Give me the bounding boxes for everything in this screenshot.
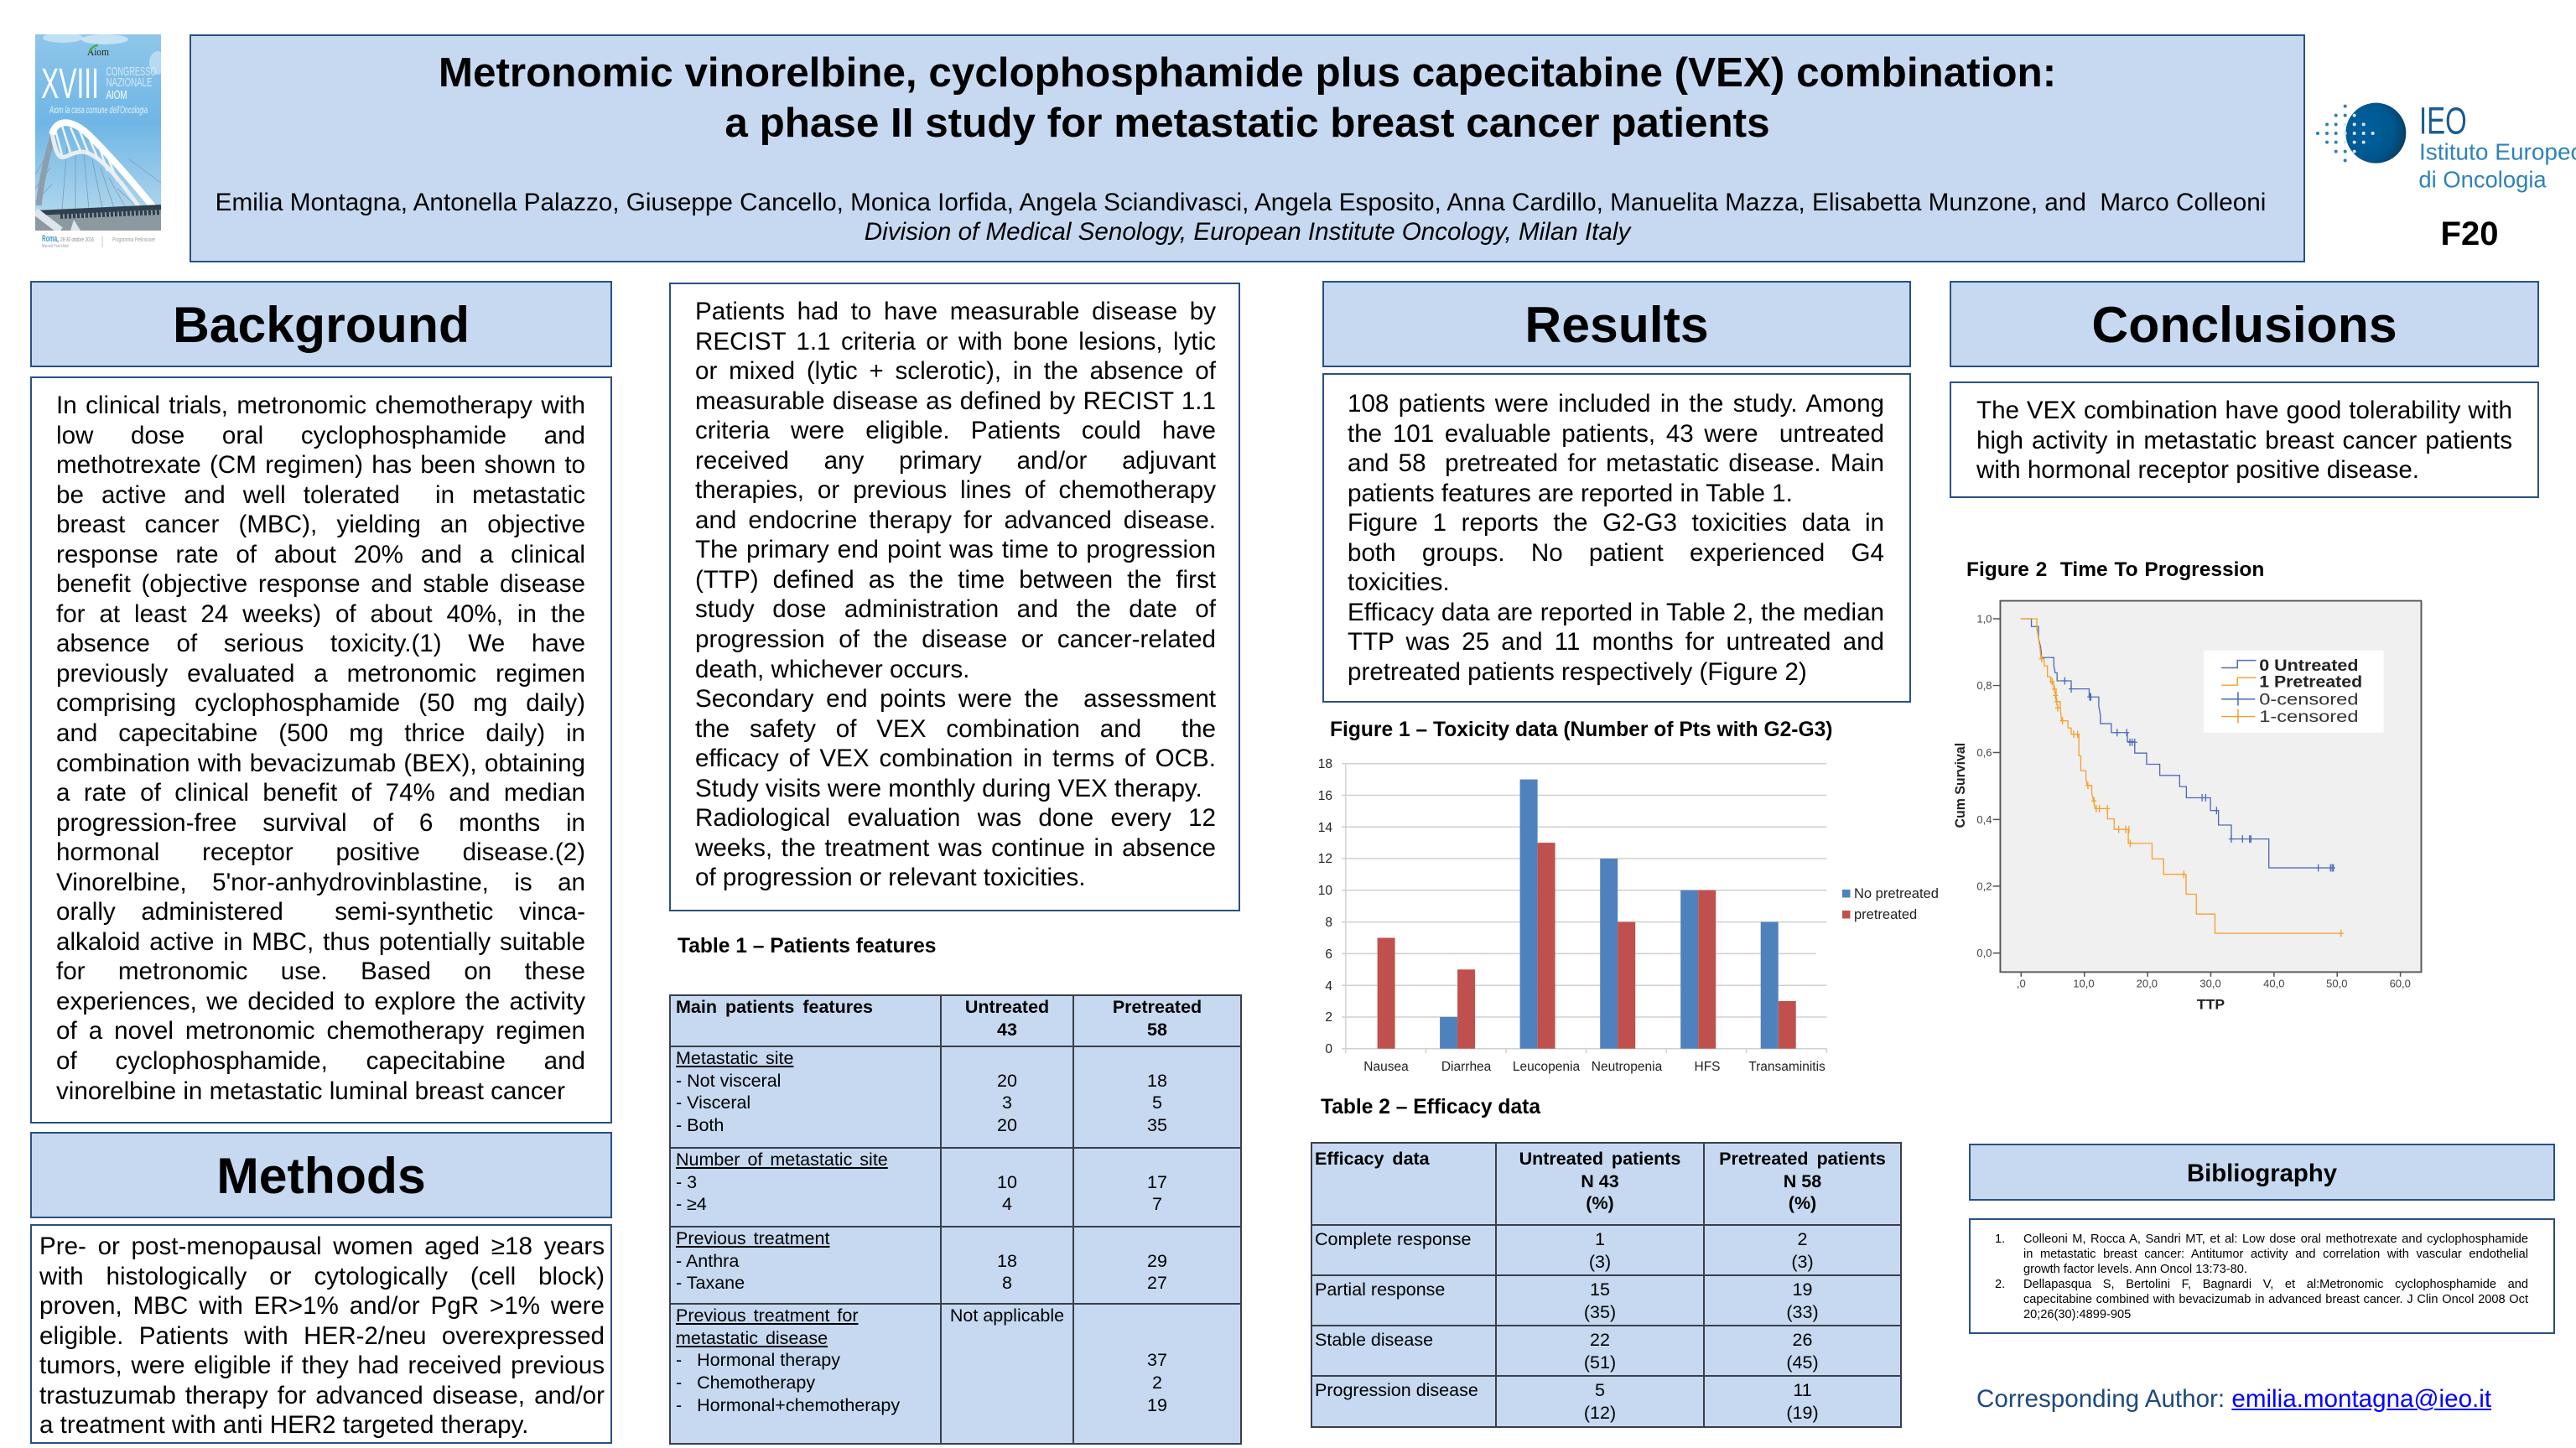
table 1: patients features: 35 [1147, 1115, 1167, 1135]
authors: Emilia Montagna, Antonella Palazzo, Giuseppe Cancello, Monica Iorfida, Angela Sciandivasci, Angela Esposito, Anna Cardillo, Manuelita Mazza, Elisabetta Munzone, and Marco Colleoni [216, 189, 2266, 216]
table 1: patients features: 17 [1147, 1172, 1167, 1192]
bar chart: toxicity data: 4 [1325, 979, 1332, 994]
heading: Results [1322, 281, 1911, 367]
table 2: efficacy data: 1 [1595, 1229, 1605, 1249]
background paragraph: a rate of clinical benefit of 74% and median [56, 779, 585, 807]
table 2 label: Table 2 – Efficacy data [1321, 1096, 1540, 1118]
survival chart: time to progression: 0,2 [1976, 880, 1992, 892]
methods continued paragraph: of progression or relevant toxicities. [695, 864, 1085, 891]
heading: Conclusions [1950, 281, 2539, 367]
methods continued paragraph: death, whichever occurs. [695, 656, 969, 683]
panel: conclusions text [1950, 381, 2539, 498]
background paragraph: vinorelbine in metastatic luminal breast cancer [56, 1077, 565, 1105]
title: a phase II study for metastatic breast cancer patients [724, 100, 1770, 146]
congress poster image: Marriott Park Hotel [42, 244, 69, 249]
results paragraph: Figure 1 reports the G2-G3 toxicities data in [1348, 509, 1884, 537]
methods paragraph: with histologically or cytologically (cell block) [39, 1263, 605, 1290]
table 2: efficacy data: (%) [1789, 1193, 1816, 1213]
table 2: efficacy data: N 43 [1581, 1171, 1619, 1191]
chart legend [1842, 886, 1939, 922]
table 1: patients features: 37 [1147, 1350, 1167, 1370]
affiliation: Division of Medical Senology, European Institute Oncology, Milan Italy [865, 218, 1630, 246]
background paragraph: be active and well tolerated in metastatic [56, 481, 585, 509]
background paragraph: experiences, we decided to explore the activity [56, 988, 585, 1015]
table 1: patients features: - ≥4 [676, 1194, 707, 1214]
bar chart: toxicity data: HFS [1694, 1060, 1721, 1074]
bar chart: toxicity data: 8 [1325, 916, 1332, 930]
survival chart: time to progression: 20,0 [2137, 978, 2158, 989]
methods continued paragraph: (TTP) defined as the time between the first [695, 566, 1216, 594]
survival chart: time to progression: 40,0 [2263, 978, 2284, 989]
table 1: patients features: 20 [997, 1071, 1017, 1091]
table 2: efficacy data: Progression disease [1315, 1380, 1478, 1400]
survival chart: time to progression: 1,0 [1976, 613, 1992, 625]
methods paragraph: Pre- or post-menopausal women aged ≥18 years [39, 1233, 605, 1260]
methods continued paragraph: the safety of VEX combination and the [695, 715, 1216, 743]
table 2: efficacy data: Untreated patients [1519, 1149, 1680, 1169]
table 2: efficacy data: 26 [1793, 1330, 1812, 1350]
panel: bibliography references [1969, 1218, 2555, 1334]
icon: IEO logo [2316, 99, 2576, 193]
background paragraph: methotrexate (CM regimen) has been shown to [56, 451, 585, 479]
results paragraph: toxicities. [1348, 568, 1450, 596]
chart legend: No pretreated [1854, 886, 1939, 901]
table 2: efficacy data: 5 [1595, 1380, 1605, 1400]
table 2: efficacy data [1311, 1142, 1902, 1428]
table 1: patients features: 18 [1147, 1071, 1167, 1091]
table 2: efficacy data: 19 [1793, 1279, 1812, 1300]
survival chart legend [2204, 651, 2384, 733]
methods continued paragraph: RECIST 1.1 criteria or with bone lesions, lytic [695, 328, 1216, 356]
bar chart: toxicity data: Transaminitis [1748, 1060, 1826, 1074]
reference 2: 2. [1995, 1278, 2005, 1291]
survival chart: time to progression: 10,0 [2073, 978, 2095, 989]
methods paragraph: a treatment with anti HER2 targeted therapy. [39, 1411, 528, 1439]
background paragraph: comprising cyclophosphamide (50 mg daily) [56, 689, 585, 717]
background paragraph: of cyclophosphamide, capecitabine and [56, 1047, 585, 1075]
results paragraph: pretreated patients respectively (Figure 2) [1348, 658, 1807, 686]
methods continued paragraph: progression of the disease or cancer-related [695, 625, 1216, 653]
table 2: efficacy data: (19) [1786, 1403, 1819, 1423]
background paragraph [56, 392, 585, 1105]
table 2: efficacy data: (33) [1786, 1302, 1819, 1322]
table 1: patients features: 43 [997, 1020, 1017, 1040]
background paragraph: for at least 24 weeks) of about 40%, in the [56, 600, 585, 628]
heading: Background [30, 281, 612, 367]
congress poster image: 28-30 ottobre 2016 [60, 237, 94, 243]
methods continued paragraph: weeks, the treatment was continue in absence [695, 834, 1216, 862]
congress poster image: XVIII [41, 60, 99, 107]
table 1: patients features: - Chemotherapy [676, 1373, 815, 1393]
congress poster image: NAZIONALE [106, 75, 153, 90]
table 1: patients features: - Taxane [676, 1273, 745, 1293]
table 2: efficacy data: N 58 [1784, 1171, 1821, 1191]
background paragraph: for metronomic use. Based on these [56, 958, 585, 985]
survival chart: time to progression: ,0 [2017, 978, 2026, 989]
results paragraph: TTP was 25 and 11 months for untreated and [1348, 628, 1884, 656]
table 1: patients features: - Not visceral [676, 1071, 781, 1091]
bar chart: toxicity data: 12 [1318, 852, 1332, 866]
table 1: patients features: - Anthra [676, 1251, 739, 1271]
methods continued paragraph: and endocrine therapy for advanced disease. [695, 506, 1216, 534]
table 1: patients features: Metastatic site [676, 1048, 793, 1068]
reference 2: capecitabine combined with bevacizumab in advanced breast cancer. J Clin Oncol 2008 Oct [2023, 1293, 2528, 1306]
table 2: efficacy data: (51) [1584, 1352, 1616, 1373]
methods continued paragraph: efficacy of VEX combination in terms of OCB. [695, 745, 1216, 772]
survival chart legend: 1-censored [2259, 708, 2358, 726]
table 1: patients features: Previous treatment [676, 1228, 829, 1248]
reference 2 [1995, 1278, 2528, 1321]
poster code: F20 [2441, 215, 2498, 252]
survival chart: time to progression: 0,6 [1976, 746, 1992, 759]
bar chart: toxicity data: Diarrhea [1441, 1060, 1492, 1074]
table 2: efficacy data: Efficacy data [1315, 1149, 1430, 1169]
congress poster image [35, 34, 161, 249]
results paragraph: patients features are reported in Table 1. [1348, 480, 1793, 507]
methods continued paragraph: Radiological evaluation was done every 12 [695, 804, 1216, 832]
bar chart: toxicity data: Neutropenia [1592, 1060, 1663, 1074]
table 1: patients features: 19 [1147, 1395, 1167, 1415]
table 1: patients features: 27 [1147, 1273, 1167, 1293]
bar chart: toxicity data: 16 [1318, 789, 1332, 803]
table 1: patients features: 2 [1152, 1373, 1162, 1393]
table 1: patients features: 20 [997, 1115, 1017, 1135]
survival chart legend: 0 Untreated [2259, 657, 2358, 675]
survival chart: time to progression: 30,0 [2199, 978, 2221, 989]
methods continued paragraph: Patients had to have measurable disease by [695, 298, 1216, 325]
survival chart legend: 1 Pretreated [2259, 673, 2362, 691]
survival chart legend: 0-censored [2259, 691, 2358, 708]
table 1: patients features: 5 [1152, 1092, 1162, 1113]
background paragraph: benefit (objective response and stable disease [56, 570, 585, 598]
survival chart: time to progression: 0,0 [1976, 947, 1992, 959]
table 2: efficacy data: (%) [1586, 1193, 1614, 1213]
heading: Bibliography: Bibliography [2187, 1160, 2337, 1187]
methods paragraph [39, 1233, 605, 1439]
methods continued paragraph: measurable disease as defined by RECIST 1.1 [695, 387, 1216, 415]
heading: Methods [30, 1132, 612, 1218]
table 1: patients features: 4 [1002, 1194, 1012, 1214]
background paragraph: alkaloid active in MBC, thus potentially suitable [56, 928, 585, 956]
methods continued paragraph: received any primary and/or adjuvant [695, 447, 1216, 475]
results paragraph [1348, 390, 1884, 686]
results paragraph: the 101 evaluable patients, 43 were untreated [1348, 420, 1884, 448]
heading: Results: Results [1524, 296, 1709, 353]
reference 2: 20;26(30):4899-905 [2023, 1308, 2131, 1321]
background paragraph: breast cancer (MBC), yielding an objective [56, 511, 585, 538]
methods continued paragraph: Study visits were monthly during VEX therapy. [695, 775, 1202, 802]
heading: Conclusions: Conclusions [2091, 296, 2397, 353]
title: Metronomic vinorelbine, cyclophosphamide plus capecitabine (VEX) combination: [439, 49, 2056, 96]
table 1: patients features: Previous treatment for [676, 1305, 859, 1326]
results paragraph: Efficacy data are reported in Table 2, the median [1348, 599, 1884, 626]
methods continued paragraph: criteria were eligible. Patients could have [695, 417, 1216, 444]
icon: IEO logo: IEO [2419, 99, 2467, 142]
reference 1: 1. [1995, 1233, 2005, 1246]
survival chart: time to progression: 0,8 [1976, 679, 1992, 692]
table 1: patients features: 7 [1152, 1194, 1162, 1214]
survival chart: time to progression: Cum Survival [1953, 743, 1968, 828]
reference 2: Dellapasqua S, Bertolini F, Bagnardi V, et al:Metronomic cyclophosphamide and [2023, 1278, 2528, 1291]
methods continued paragraph: study dose administration and the date of [695, 595, 1216, 623]
heading: Methods: Methods [216, 1147, 426, 1204]
background paragraph: of a novel metronomic chemotherapy regimen [56, 1017, 585, 1045]
reference 1: Colleoni M, Rocca A, Sandri MT, et al: Low dose oral methotrexate and cyclophosphamide [2023, 1233, 2528, 1246]
table 1: patients features: - Hormonal therapy [676, 1350, 840, 1370]
background paragraph: absence of serious toxicity.(1) We have [56, 630, 585, 657]
conclusions paragraph: The VEX combination have good tolerability with [1976, 397, 2512, 424]
series: pretreated [1378, 843, 1796, 1049]
background paragraph: In clinical trials, metronomic chemotherapy with [56, 392, 585, 419]
results paragraph: 108 patients were included in the study. Among [1348, 390, 1884, 418]
conclusions paragraph [1976, 397, 2512, 484]
methods continued paragraph: The primary end point was time to progression [695, 536, 1216, 563]
corresponding author: Corresponding Author: emilia.montagna@ieo.it [1976, 1385, 2491, 1413]
bar chart: toxicity data: 2 [1325, 1010, 1332, 1025]
title banner [190, 34, 2305, 262]
methods paragraph: tumors, were eligible if they had received previous [39, 1352, 605, 1379]
table 1: patients features: 58 [1147, 1020, 1167, 1040]
methods continued paragraph: therapies, or previous lines of chemotherapy [695, 476, 1216, 504]
background paragraph: combination with bevacizumab (BEX), obtaining [56, 750, 585, 777]
table 2: efficacy data: (35) [1584, 1302, 1616, 1322]
background paragraph: orally administered semi-synthetic vinca- [56, 898, 585, 926]
table 1: patients features: 3 [1002, 1092, 1012, 1113]
background paragraph: Vinorelbine, 5'nor-anhydrovinblastine, is an [56, 869, 585, 896]
title [439, 49, 2056, 146]
methods continued paragraph: or mixed (lytic + sclerotic), in the absence of [695, 357, 1216, 385]
methods paragraph: proven, MBC with ER>1% and/or PgR >1% were [39, 1292, 605, 1320]
panel: background text [30, 376, 612, 1124]
figure 2 label: Figure 2 Time To Progression [1966, 558, 2264, 581]
table 2: efficacy data: 15 [1590, 1279, 1610, 1300]
conclusions paragraph: with hormonal receptor positive disease. [1976, 456, 2419, 484]
congress poster image: AIOM [106, 88, 127, 102]
series: No pretreated [1440, 780, 1779, 1049]
table 2: efficacy data: (12) [1584, 1403, 1616, 1423]
background paragraph: previously evaluated a metronomic regimen [56, 660, 585, 688]
bar chart: toxicity data: Leucopenia [1513, 1060, 1580, 1074]
conclusions paragraph: high activity in metastatic breast cancer patients [1976, 427, 2512, 454]
methods paragraph: trastuzumab therapy for advanced disease, and/or [39, 1382, 605, 1409]
results paragraph: both groups. No patient experienced G4 [1348, 539, 1884, 567]
chart legend: pretreated [1854, 907, 1917, 922]
background paragraph: hormonal receptor positive disease.(2) [56, 838, 585, 866]
table 2: efficacy data: (3) [1589, 1252, 1611, 1272]
panel: methods text [30, 1224, 612, 1444]
bar chart: toxicity data: Nausea [1363, 1060, 1409, 1074]
icon: IEO logo: di Oncologia [2418, 166, 2547, 192]
background paragraph: and capecitabine (500 mg thrice daily) in [56, 719, 585, 747]
table 1 label: Table 1 – Patients features [678, 935, 936, 958]
table 1: patients features: Pretreated [1113, 997, 1202, 1017]
table 2: efficacy data: 22 [1590, 1330, 1610, 1350]
table 1: patients features: - Visceral [676, 1092, 750, 1113]
table 2: efficacy data: Pretreated patients [1719, 1149, 1886, 1169]
bar chart: toxicity data [1318, 757, 1939, 1074]
table 2: efficacy data: 2 [1798, 1229, 1807, 1249]
results paragraph: and 58 pretreated for metastatic disease. Main [1348, 449, 1884, 477]
congress poster image: Programma Preliminare [112, 237, 155, 243]
heading: Bibliography [1969, 1144, 2555, 1201]
background paragraph: low dose oral cyclophosphamide and [56, 422, 585, 449]
curve: pretreated [2021, 619, 2344, 937]
methods paragraph: eligible. Patients with HER-2/neu overexpressed [39, 1322, 605, 1350]
survival chart: time to progression: 50,0 [2326, 978, 2347, 989]
table 1: patients features: - 3 [676, 1172, 697, 1192]
methods continued paragraph: Secondary end points were the assessment [695, 685, 1216, 713]
table 2: efficacy data: Partial response [1315, 1279, 1445, 1300]
heading: Background: Background [173, 296, 470, 353]
curve: untreated [2021, 619, 2335, 872]
bar chart: toxicity data: 14 [1318, 821, 1332, 835]
table 1: patients features: 29 [1147, 1251, 1167, 1271]
methods continued paragraph [695, 298, 1216, 891]
congress poster image: Aiom [87, 45, 109, 58]
table 2: efficacy data: Stable disease [1315, 1330, 1433, 1350]
background paragraph: response rate of about 20% and a clinical [56, 541, 585, 568]
table 1: patients features: metastatic disease [676, 1328, 828, 1348]
congress poster image: Roma, [42, 234, 59, 244]
reference 1: growth factor levels. Ann Oncol 13:73-80. [2023, 1263, 2247, 1276]
reference 1 [1995, 1233, 2528, 1276]
table 2: efficacy data: (45) [1786, 1352, 1819, 1373]
survival chart: time to progression: 0,4 [1976, 813, 1992, 826]
background paragraph: progression-free survival of 6 months in [56, 809, 585, 837]
table 2: efficacy data: 11 [1793, 1380, 1812, 1400]
survival chart: time to progression [1953, 600, 2422, 1013]
reference 1: in metastatic breast cancer: Antitumor activity and correlation with vascular endothelial [2023, 1248, 2528, 1261]
table 1: patients features: Main patients features [676, 997, 873, 1017]
table 1: patients features: Untreated [965, 997, 1049, 1017]
table 1: patients features: 8 [1002, 1273, 1012, 1293]
table 2: efficacy data: Complete response [1315, 1229, 1471, 1249]
table 1: patients features [669, 994, 1242, 1445]
table 1: patients features: 18 [997, 1251, 1017, 1271]
survival chart: time to progression: TTP [2197, 996, 2225, 1013]
table 2: efficacy data: (3) [1791, 1252, 1814, 1272]
panel: results text [1322, 373, 1911, 703]
survival chart: time to progression: 60,0 [2390, 978, 2411, 989]
panel: methods continued [669, 283, 1240, 911]
table 1: patients features: Not applicable [950, 1305, 1064, 1326]
figure 1 label: Figure 1 – Toxicity data (Number of Pts with G2-G3) [1330, 719, 1832, 741]
bar chart: toxicity data: 0 [1325, 1042, 1332, 1056]
bar chart: toxicity data: 10 [1318, 884, 1332, 898]
table 1: patients features: - Both [676, 1115, 724, 1135]
bar chart: toxicity data: 6 [1325, 947, 1332, 962]
table 1: patients features: Number of metastatic site [676, 1150, 888, 1170]
table 1: patients features: - Hormonal+chemotherapy [676, 1395, 900, 1415]
bar chart: toxicity data: 18 [1318, 757, 1332, 771]
table 1: patients features: 10 [997, 1172, 1017, 1192]
